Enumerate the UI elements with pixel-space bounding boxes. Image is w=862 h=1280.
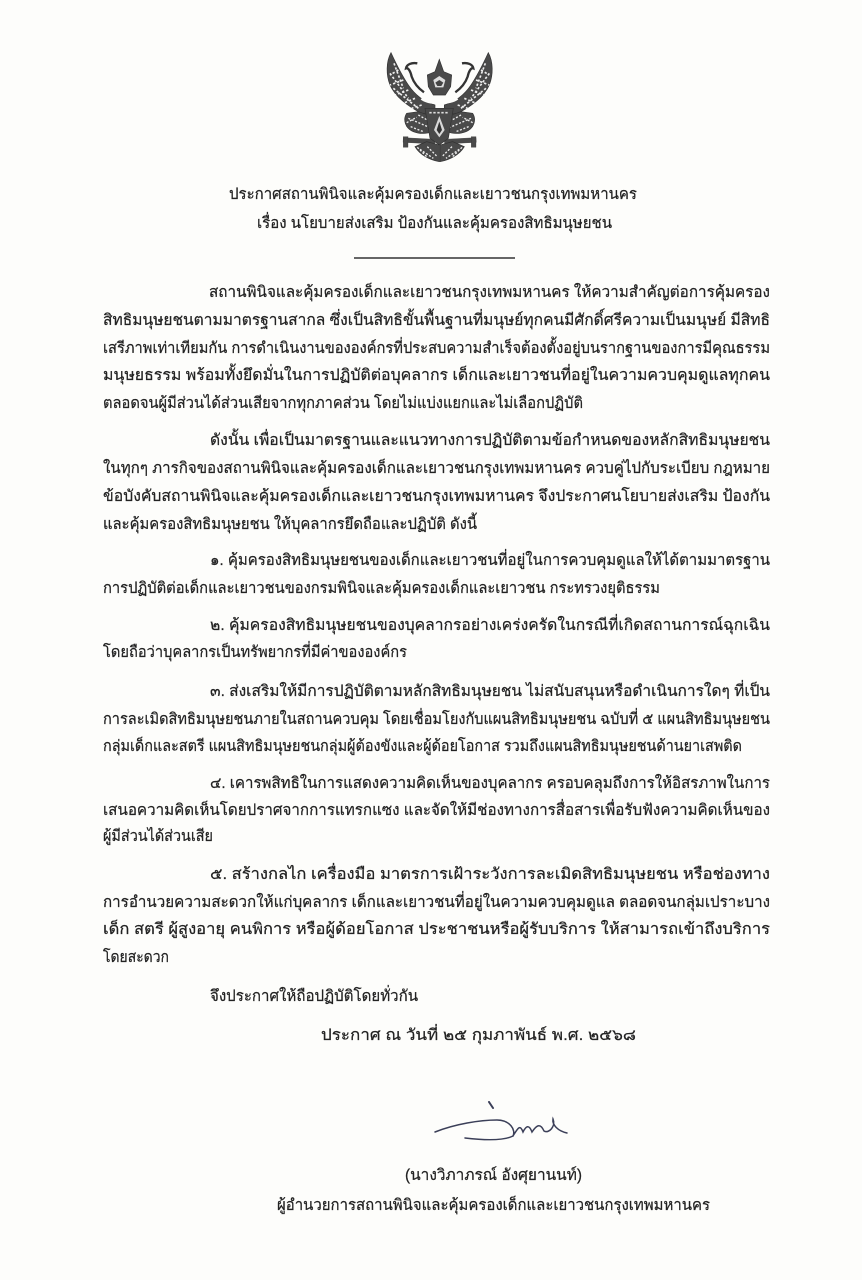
- paragraph: policy rationale: ข้อบังคับสถานพินิจและคุ้มครองเด็กและเยาวชนกรุงเทพมหานคร จึงประกาศนโยบายส่งเสริม ป้องกัน: [103, 486, 770, 506]
- paragraph: introduction: ตลอดจนผู้มีส่วนได้ส่วนเสียจากทุกภาคส่วน โดยไม่แบ่งแยกและไม่เลือกปฏิบัติ: [103, 394, 583, 413]
- policy item 5: โดยสะดวก: [103, 948, 169, 966]
- paragraph: introduction: สถานพินิจและคุ้มครองเด็กและเยาวชนกรุงเทพมหานคร ให้ความสำคัญต่อการคุ้มครอง: [209, 282, 770, 302]
- heading: announcement title: [229, 184, 637, 233]
- policy item 5: เด็ก สตรี ผู้สูงอายุ คนพิการ หรือผู้ด้อยโอกาส ประชาชนหรือผู้รับบริการ ให้สามารถเข้าถึงบริการ: [103, 919, 770, 939]
- paragraph: policy rationale: และคุ้มครองสิทธิมนุษยชน ให้บุคลากรยึดถือและปฏิบัติ ดังนี้: [103, 512, 477, 534]
- heading: announcement title: เรื่อง นโยบายส่งเสริม ป้องกันและคุ้มครองสิทธิมนุษยชน: [257, 212, 612, 233]
- policy item 3: การละเมิดสิทธิมนุษยชนภายในสถานควบคุม โดยเชื่อมโยงกับแผนสิทธิมนุษยชน ฉบับที่ ๕ แผนสิทธิมนุษยชน: [103, 708, 770, 729]
- signatory name: (นางวิภาภรณ์ อังศุยานนท์): [405, 1166, 582, 1185]
- closing statement: จึงประกาศให้ถือปฏิบัติโดยทั่วกัน: [210, 985, 418, 1005]
- paragraph: introduction: สิทธิมนุษยชนตามมาตรฐานสากล ซึ่งเป็นสิทธิขั้นพื้นฐานที่มนุษย์ทุกคนมีศักดิ์ศรีความเป็นมนุษย์ มีสิทธิ: [103, 308, 770, 330]
- policy item 1: [103, 549, 770, 598]
- policy item 4: ผู้มีส่วนได้ส่วนเสีย: [103, 827, 213, 846]
- heading: announcement title: ประกาศสถานพินิจและคุ้มครองเด็กและเยาวชนกรุงเทพมหานคร: [229, 184, 637, 204]
- signatory title: ผู้อำนวยการสถานพินิจและคุ้มครองเด็กและเยาวชนกรุงเทพมหานคร: [277, 1195, 710, 1215]
- date line: ประกาศ ณ วันที่ ๒๕ กุมภาพันธ์ พ.ศ. ๒๕๖๘: [321, 1024, 636, 1045]
- paragraph: policy rationale: ดังนั้น เพื่อเป็นมาตรฐานและแนวทางการปฏิบัติตามข้อกำหนดของหลักสิทธิมนุษยชน: [210, 428, 770, 450]
- policy item 5: [103, 863, 770, 966]
- policy item 3: [103, 680, 770, 756]
- paragraph: policy rationale: [103, 428, 770, 534]
- paragraph: introduction: [103, 282, 770, 413]
- icon: Garuda emblem: [387, 53, 492, 162]
- paragraph: introduction: มนุษยธรรม พร้อมทั้งยึดมั่นในการปฏิบัติต่อบุคลากร เด็กและเยาวชนที่อยู่ในความควบคุมดูแลทุกคน: [103, 363, 770, 385]
- policy item 1: ๑. คุ้มครองสิทธิมนุษยชนของเด็กและเยาวชนที่อยู่ในการควบคุมดูแลให้ได้ตามมาตรฐาน: [210, 549, 770, 570]
- policy item 5: การอำนวยความสะดวกให้แก่บุคลากร เด็กและเยาวชนที่อยู่ในความควบคุมดูแล ตลอดจนกลุ่มเปราะบาง: [103, 891, 770, 912]
- policy item 4: ๔. เคารพสิทธิในการแสดงความคิดเห็นของบุคลากร ครอบคลุมถึงการให้อิสรภาพในการ: [210, 773, 770, 793]
- policy item 4: [103, 773, 770, 846]
- policy item 4: เสนอความคิดเห็นโดยปราศจากการแทรกแซง และจัดให้มีช่องทางการสื่อสารเพื่อรับฟังความคิดเห็นของ: [103, 799, 770, 819]
- policy item 2: โดยถือว่าบุคลากรเป็นทรัพยากรที่มีค่าขององค์กร: [103, 641, 407, 662]
- policy item 2: ๒. คุ้มครองสิทธิมนุษยชนของบุคลากรอย่างเคร่งครัดในกรณีที่เกิดสถานการณ์ฉุกเฉิน: [210, 614, 770, 635]
- policy item 1: การปฏิบัติต่อเด็กและเยาวชนของกรมพินิจและคุ้มครองเด็กและเยาวชน กระทรวงยุติธรรม: [103, 578, 660, 598]
- paragraph: policy rationale: ในทุกๆ ภารกิจของสถานพินิจและคุ้มครองเด็กและเยาวชนกรุงเทพมหานคร ควบคู่ไปกับระเบียบ กฎหมาย: [103, 458, 770, 478]
- policy item 5: ๕. สร้างกลไก เครื่องมือ มาตรการเฝ้าระวังการละเมิดสิทธิมนุษยชน หรือช่องทาง: [210, 863, 770, 884]
- signature: [435, 1102, 567, 1140]
- policy item 2: [103, 614, 770, 662]
- policy item 3: ๓. ส่งเสริมให้มีการปฏิบัติตามหลักสิทธิมนุษยชน ไม่สนับสนุนหรือดำเนินการใดๆ ที่เป็น: [210, 680, 770, 701]
- policy item 3: กลุ่มเด็กและสตรี แผนสิทธิมนุษยชนกลุ่มผู้ต้องขังและผู้ด้อยโอกาส รวมถึงแผนสิทธิมนุษยชนด้านยาเสพติด: [103, 736, 742, 756]
- paragraph: introduction: เสรีภาพเท่าเทียมกัน การดำเนินงานขององค์กรที่ประสบความสำเร็จต้องตั้งอยู่บนรากฐานของการมีคุณธรรม: [103, 336, 770, 358]
